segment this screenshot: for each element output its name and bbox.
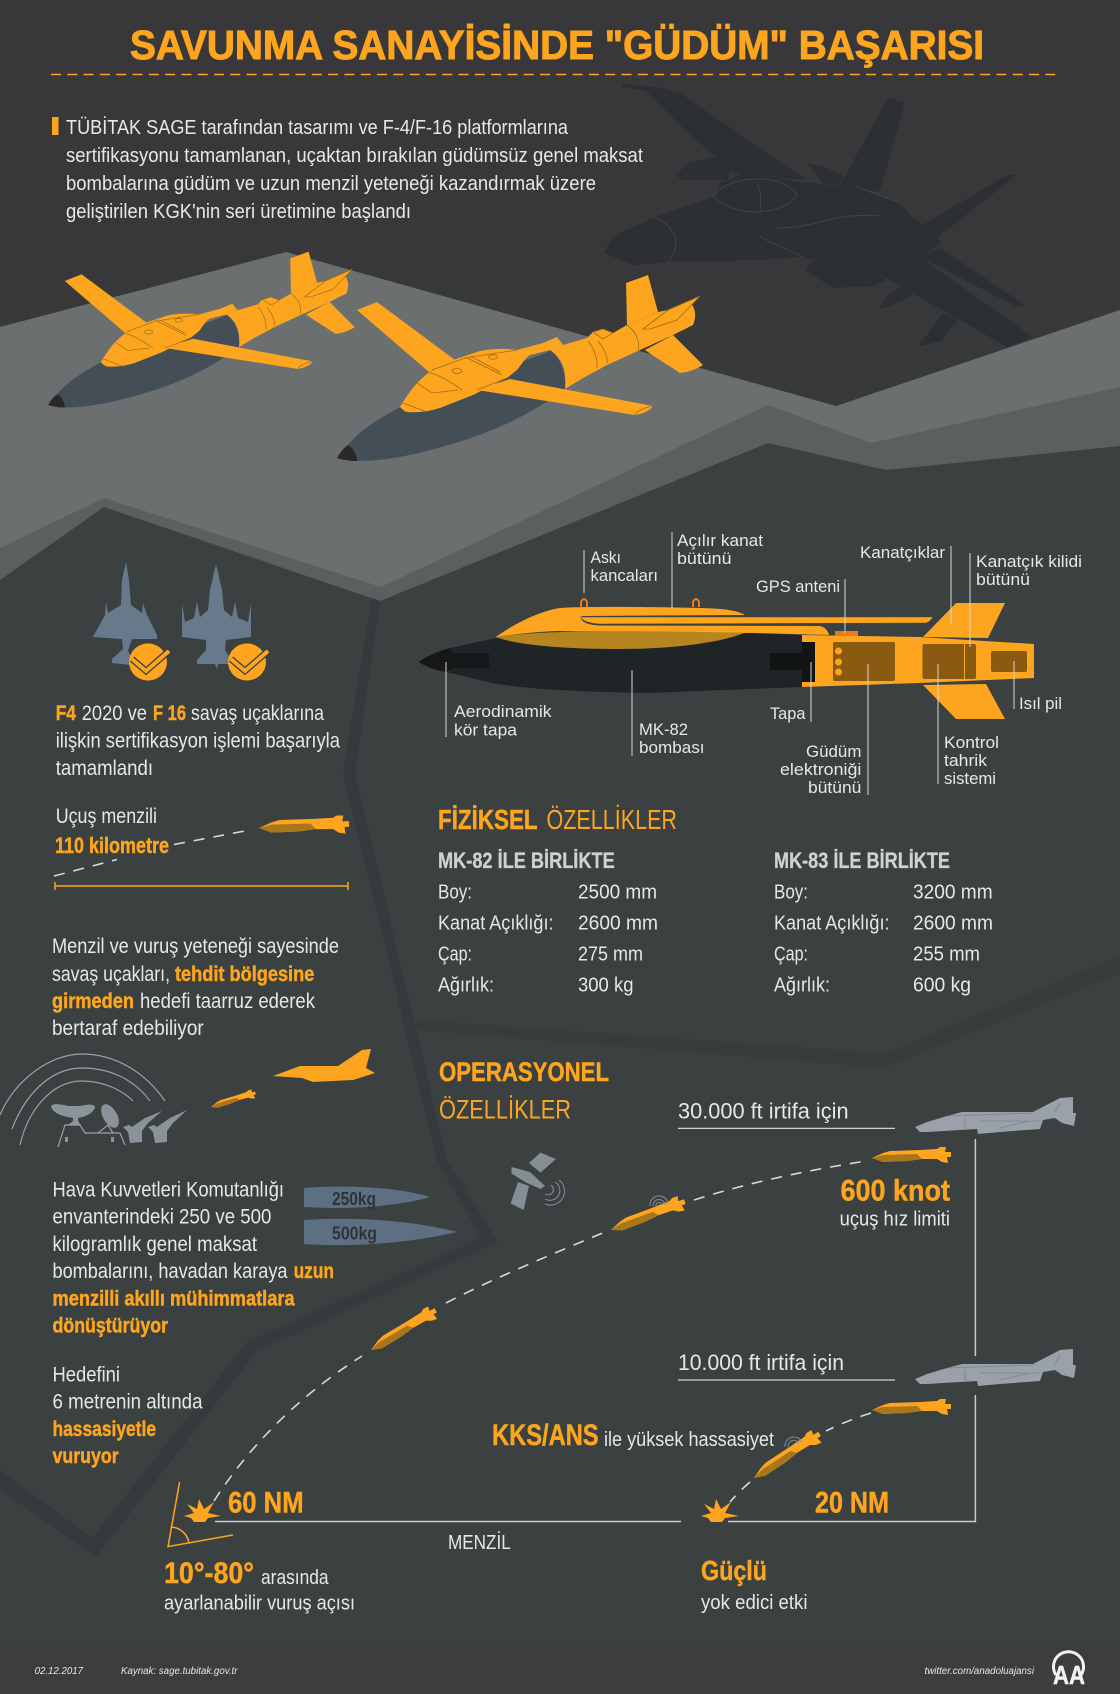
text: air force: kilogramlık genel maksat: [52, 1233, 257, 1256]
text: certification: F4: [56, 702, 76, 725]
label: GPS: GPS anteni: [756, 577, 840, 596]
table: MK-82: Kanat Açıklığı:: [438, 912, 554, 934]
jet: 30.000 ft: [915, 1097, 1076, 1134]
label: MK-82: bombası: [639, 738, 704, 757]
label: guidance: bütünü: [808, 778, 861, 797]
label: hooks: [590, 548, 658, 585]
text: certification: 2020 ve: [82, 702, 147, 725]
text: precision: Hedefini: [52, 1363, 120, 1386]
table: MK-83: MK-83 İLE BİRLİKTE: [774, 848, 950, 873]
text: threat zone: bertaraf edebiliyor: [52, 1017, 204, 1040]
footer: twitter: twitter.com/anadoluajansi: [924, 1666, 1035, 1677]
table: MK-83: Ağırlık:: [774, 975, 830, 997]
title dashed rule: [51, 74, 1061, 76]
logo: AA: [1053, 1652, 1085, 1690]
table: MK-83: 3200 mm: [913, 881, 993, 903]
nose fuze: [419, 648, 489, 672]
bomb size 500kg: [304, 1219, 457, 1245]
footer: date: 02.12.2017: [35, 1666, 83, 1677]
wing bar: [580, 617, 933, 624]
table: MK-82: Çap:: [438, 944, 472, 966]
text: threat zone: [52, 935, 339, 1040]
label: precision: KKS/ANS: [492, 1419, 599, 1452]
text: certification: F 16: [153, 702, 186, 725]
bomb size 250kg: [304, 1186, 430, 1209]
text: threat zone: girmeden: [52, 990, 134, 1013]
diagram: guided bomb cutaway: [419, 531, 1082, 797]
label: impact angle: arasında: [261, 1567, 329, 1589]
label: hooks: Askı: [590, 548, 621, 567]
lugs: [581, 599, 699, 607]
icon: F-4 certified: [93, 562, 169, 681]
label: destructive: Güçlü: [701, 1555, 767, 1586]
label: wing: bütünü: [677, 549, 732, 568]
label: 30.000 ft: 30.000 ft irtifa için: [678, 1098, 849, 1123]
label: control: tahrik: [944, 751, 988, 770]
text: certification: [56, 702, 340, 780]
label: nose: Aerodinamik: [454, 702, 552, 721]
guided bomb: release low: [872, 1399, 951, 1415]
label: impact angle: 10°-80°: [164, 1557, 254, 1590]
label: impact angle: ayarlanabilir vuruş açısı: [164, 1593, 355, 1615]
bomb size 500kg: 500kg: [332, 1223, 377, 1243]
icon: radar site: [0, 1054, 187, 1147]
text: threat zone: Menzil ve vuruş yeteneği sayesinde: [52, 935, 339, 958]
text: threat zone: savaş uçakları,: [52, 963, 170, 986]
table: MK-82: 275 mm: [578, 944, 643, 966]
bomb body: [419, 633, 802, 693]
guided bomb: terminal: [748, 1427, 824, 1482]
intro text block: geliştirilen KGK'nin seri üretimine başlandı: [66, 201, 411, 223]
table: MK-83: Çap:: [774, 944, 808, 966]
terrain: mid band: [0, 387, 1120, 700]
guided bomb: mid: [608, 1195, 688, 1235]
leader lines: [446, 532, 1014, 795]
text: threat zone: hedefi taarruz ederek: [140, 990, 315, 1013]
text: precision: [52, 1363, 203, 1468]
heading: operational: OPERASYONEL: [439, 1057, 609, 1087]
subtle band right: [416, 956, 1120, 1068]
icon: signal arcs: [650, 1196, 668, 1206]
label: destructive: yok edici etki: [701, 1592, 808, 1614]
label: destructive: [701, 1555, 808, 1614]
text: threat zone: tehdit bölgesine: [175, 963, 314, 986]
label: speed: uçuş hız limiti: [840, 1209, 950, 1231]
table: MK-82: [438, 848, 658, 997]
label: fins: Kanatçıklar: [860, 543, 945, 562]
logo: AA: AA: [1053, 1660, 1085, 1690]
strake fairing: [496, 607, 829, 637]
label: 60 NM: 60 NM: [228, 1486, 304, 1520]
icon: signal arcs low: [785, 1437, 802, 1447]
label: guidance: Güdüm: [806, 742, 861, 761]
intro text block: [52, 116, 643, 223]
table: MK-83: [774, 848, 993, 997]
label: control: [944, 733, 999, 788]
label: hooks: kancaları: [590, 566, 658, 585]
label: precision: ile yüksek hassasiyet: [604, 1429, 774, 1451]
icon: explosion 60 NM: [184, 1499, 221, 1522]
table: MK-83: 255 mm: [913, 944, 980, 966]
tail fuze: [770, 642, 815, 682]
label: impact angle: [164, 1557, 355, 1615]
label: control: sistemi: [944, 769, 996, 788]
electronics bays: [833, 642, 1027, 681]
table: MK-83: Boy:: [774, 881, 808, 903]
table: MK-82: Ağırlık:: [438, 975, 494, 997]
range: 110 km: 110 kilometre: [55, 833, 169, 858]
table: MK-82: 2600 mm: [578, 912, 658, 934]
label: MK-82: [639, 720, 704, 757]
table: MK-82: 2500 mm: [578, 881, 657, 903]
GPS antenna block: [835, 631, 858, 636]
label: fin lock: [976, 552, 1082, 589]
altitude and range axis: [215, 1139, 975, 1522]
label: guidance: elektroniği: [780, 760, 861, 779]
icon: orange F-16 and bomb: [209, 1049, 375, 1110]
footer bar: [0, 1645, 1120, 1694]
guided bomb: steep: [366, 1304, 440, 1354]
heading: physical: [438, 804, 677, 835]
icon: impact angle: [168, 1482, 233, 1547]
label: battery: Isıl pil: [1019, 694, 1062, 713]
guided bomb: release high: [872, 1147, 951, 1163]
text: certification: savaş uçaklarına: [191, 702, 324, 725]
label: MK-82: MK-82: [639, 720, 688, 739]
silhouette: fighter jet: [604, 84, 1033, 347]
table: MK-83: 600 kg: [913, 975, 971, 997]
intro text block: TÜBİTAK SAGE tarafından tasarımı ve F-4/F-16 platformlarına: [66, 116, 569, 139]
label: wing: Açılır kanat: [677, 531, 763, 550]
text: air force: [52, 1178, 334, 1338]
label: range: MENZİL: [448, 1531, 511, 1554]
title: SAVUNMA SANAYİSİNDE "GÜDÜM" BAŞARISI: [130, 22, 984, 68]
fins: [923, 603, 1005, 719]
label: fin lock: bütünü: [976, 570, 1030, 589]
icon: satellite: [511, 1153, 565, 1210]
trajectory: 10.000 ft: [730, 1413, 871, 1502]
text: certification: tamamlandı: [56, 757, 153, 780]
label: 10.000 ft: 10.000 ft irtifa için: [678, 1350, 844, 1375]
range: 110 km: Uçuş menzili: [56, 805, 157, 828]
heading: physical: FİZİKSEL: [438, 804, 538, 835]
terrain: upper grey plane: [0, 252, 1120, 700]
text: air force: envanterindeki 250 ve 500: [52, 1206, 271, 1229]
heading: operational: [439, 1057, 609, 1124]
label: speed: 600 knot: [840, 1174, 950, 1208]
label: fuze: Tapa: [770, 704, 806, 723]
terrain: dark foreground: [0, 443, 1120, 1644]
kit tail section: [802, 635, 1034, 687]
intro text block: bombalarına güdüm ve uzun menzil yeteneği kazandırmak üzere: [66, 173, 596, 195]
label: precision: [492, 1419, 774, 1452]
label: 20 NM: 20 NM: [815, 1486, 889, 1520]
label: fin lock: Kanatçık kilidi: [976, 552, 1082, 571]
label: guidance: [780, 742, 861, 797]
bay dots: [835, 644, 965, 679]
table: MK-83: 2600 mm: [913, 912, 993, 934]
table: MK-82: 300 kg: [578, 975, 634, 997]
table: MK-82: Boy:: [438, 881, 472, 903]
intro text block: sertifikasyonu tamamlanan, uçaktan bırakılan güdümsüz genel maksat: [66, 145, 643, 167]
text: air force: dönüştürüyor: [52, 1315, 168, 1338]
bomb size 250kg: 250kg: [332, 1189, 376, 1209]
table: MK-82: MK-82 İLE BİRLİKTE: [438, 848, 615, 873]
jet: 10.000 ft: [915, 1349, 1076, 1386]
table: MK-83: Kanat Açıklığı:: [774, 912, 890, 934]
label: speed: [840, 1174, 950, 1231]
text: air force: Hava Kuvvetleri Komutanlığı: [52, 1178, 284, 1201]
guided bomb illustration: small: [48, 252, 355, 408]
text: precision: vuruyor: [52, 1445, 119, 1468]
heading: physical: ÖZELLİKLER: [546, 804, 677, 835]
text: certification: ilişkin sertifikasyon işlemi başarıyla: [56, 730, 340, 752]
label: nose: kör tapa: [454, 720, 518, 740]
text: air force: uzun: [294, 1260, 334, 1283]
range: 110 km: [54, 805, 349, 890]
text: air force: bombalarını, havadan karaya: [52, 1260, 288, 1283]
footer: source: Kaynak: sage.tubitak.gov.tr: [121, 1666, 238, 1677]
label: wing: [677, 531, 763, 568]
icon: F-16 certified: [182, 564, 268, 681]
guided bomb illustration: large: [337, 275, 703, 461]
trajectory: 30.000 ft: [214, 1161, 866, 1501]
heading: operational: ÖZELLİKLER: [439, 1093, 571, 1124]
label: nose: [454, 702, 552, 740]
text: precision: 6 metrenin altında: [52, 1391, 203, 1414]
fairing lower translucent: [496, 631, 744, 649]
icon: explosion 20 NM: [701, 1499, 739, 1522]
text: air force: menzilli akıllı mühimmatlara: [52, 1287, 295, 1310]
label: control: Kontrol: [944, 733, 999, 752]
text: precision: hassasiyetle: [52, 1418, 156, 1441]
subtle band left frame: [0, 598, 498, 1557]
